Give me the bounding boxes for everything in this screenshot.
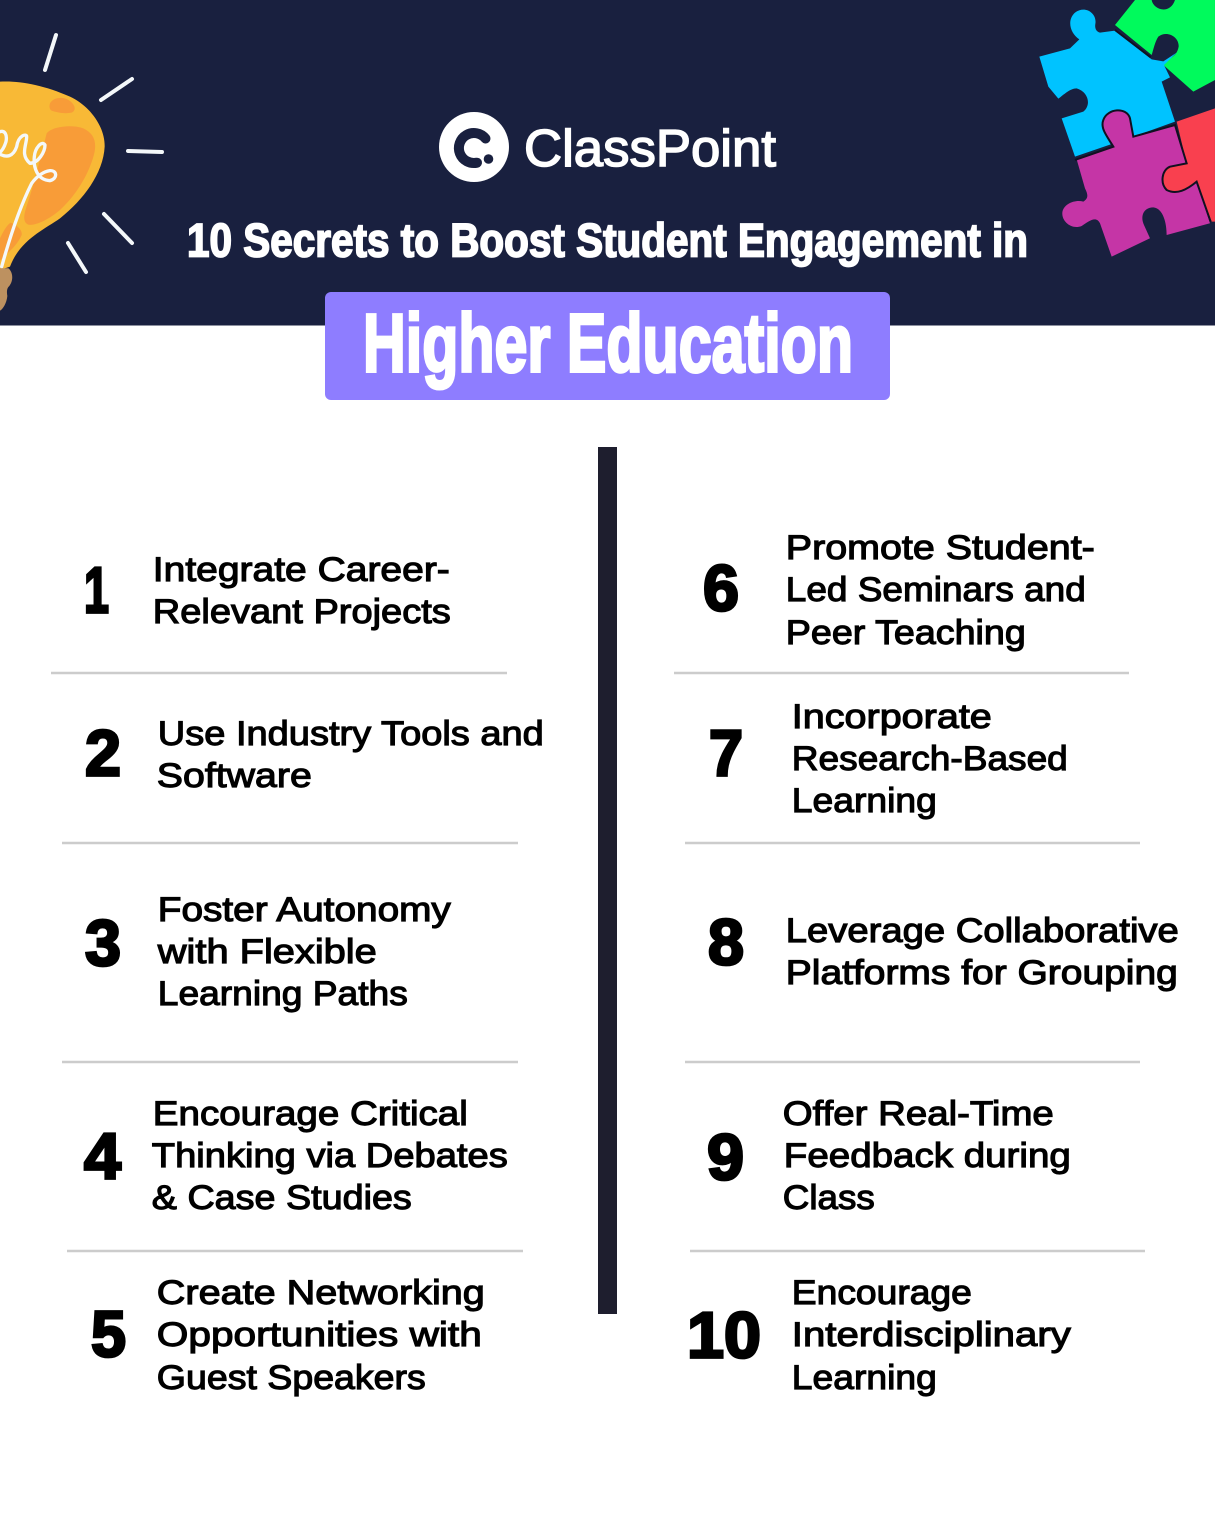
header band <box>0 0 1215 326</box>
item 7: Learning <box>792 782 937 820</box>
banner: Higher Education: Higher Education <box>363 296 853 390</box>
separators <box>51 673 1145 1251</box>
item 6: Led Seminars and <box>786 571 1086 609</box>
item 10: Encourage <box>792 1274 972 1312</box>
item 7: Research-Based <box>792 740 1068 778</box>
item 2: Use Industry Tools and <box>158 715 544 753</box>
item 4 <box>84 1095 508 1217</box>
icon: jigsaw puzzle pieces <box>1039 0 1215 257</box>
item 9: Class <box>783 1179 875 1217</box>
item 5: Opportunities with <box>157 1316 482 1354</box>
item 1: Relevant Projects <box>153 593 451 631</box>
blue piece <box>1039 10 1177 157</box>
item 5: Guest Speakers <box>157 1359 426 1397</box>
item 1: Integrate Career- <box>153 551 450 589</box>
banner: Higher Education <box>325 292 890 400</box>
item 8: Leverage Collaborative <box>786 912 1179 950</box>
item 9: Offer Real-Time <box>783 1095 1054 1133</box>
item 5 <box>91 1274 485 1397</box>
icon: light bulb <box>0 82 105 311</box>
center divider <box>598 447 617 1314</box>
item 6: Peer Teaching <box>786 614 1026 652</box>
item 10: Learning <box>792 1359 937 1397</box>
item 8: Platforms for Grouping <box>786 954 1178 992</box>
item 10 <box>687 1274 1072 1397</box>
icon: light rays <box>45 35 162 272</box>
item 8: 8 <box>708 906 744 978</box>
item 5: 5 <box>91 1298 126 1370</box>
logo wordmark: ClassPoint <box>524 120 777 178</box>
item 3: with Flexible <box>157 933 377 971</box>
item 4: Encourage Critical <box>153 1095 468 1133</box>
item 2: 2 <box>85 716 121 790</box>
item 10: 10 <box>687 1298 761 1372</box>
item 1: 1 <box>84 554 109 626</box>
item 8 <box>708 906 1179 992</box>
item 4: 4 <box>84 1120 121 1192</box>
red piece <box>1163 108 1215 222</box>
logo mark <box>439 112 509 182</box>
item 7: 7 <box>709 716 743 790</box>
item 7 <box>709 698 1068 820</box>
item 4: & Case Studies <box>152 1179 412 1217</box>
item 9: 9 <box>707 1120 744 1194</box>
item 9 <box>707 1095 1071 1217</box>
puzzle seams <box>1075 30 1211 222</box>
item 6: 6 <box>703 552 739 624</box>
logo: ClassPoint <box>439 112 777 182</box>
item 3: 3 <box>85 906 121 980</box>
item 6: Promote Student- <box>786 529 1095 567</box>
purple piece <box>1062 110 1210 257</box>
item 4: Thinking via Debates <box>152 1137 508 1175</box>
item 9: Feedback during <box>784 1137 1071 1175</box>
item 3: Foster Autonomy <box>158 891 452 929</box>
item 3 <box>85 891 452 1013</box>
item 3: Learning Paths <box>158 975 408 1013</box>
item 5: Create Networking <box>157 1274 485 1312</box>
title: 10 Secrets to Boost Student Engagement in <box>187 214 1028 266</box>
item 1 <box>84 551 451 631</box>
item 10: Interdisciplinary <box>792 1316 1072 1354</box>
item 2: Software <box>157 757 312 795</box>
green piece <box>1115 0 1215 92</box>
item 7: Incorporate <box>792 698 992 736</box>
item 6 <box>703 529 1095 652</box>
item 2 <box>85 715 544 795</box>
